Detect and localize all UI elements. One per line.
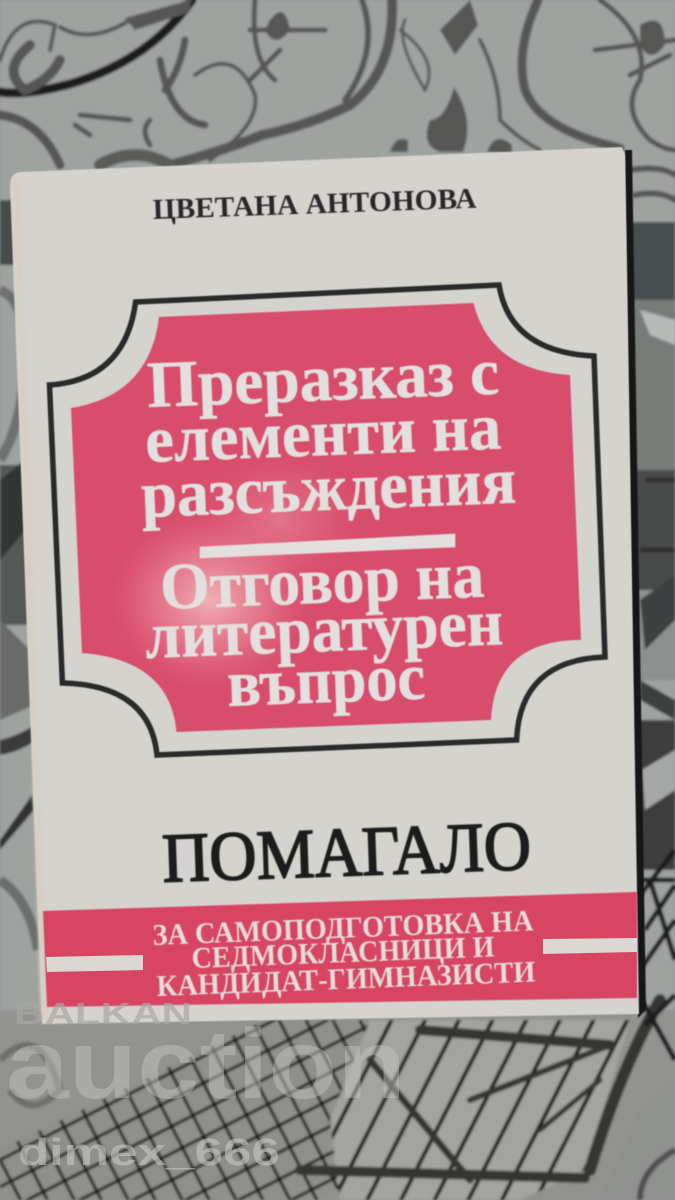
background: right lattice (640, 850, 675, 1060)
watermark: BALKAN: BALKAN (14, 996, 192, 1031)
cover page (10, 147, 639, 1024)
watermark: username: dimex_666 (18, 1132, 280, 1174)
cover aged edge (14, 180, 48, 1020)
band line 2: СЕДМОКЛАСНИЦИ И (191, 930, 495, 975)
pink plaque (71, 303, 581, 732)
author name: ЦВЕТАНА АНТОНОВА (152, 184, 478, 226)
title line 1: Преразказ с (146, 336, 500, 422)
background: lower fabric (0, 1010, 675, 1200)
title line 4: Отговор на (159, 539, 485, 624)
title panel (71, 303, 581, 732)
pink strip (43, 892, 637, 1007)
divider bar (200, 534, 455, 558)
white bar left (46, 955, 143, 972)
ornamental frame (50, 285, 605, 755)
background: dark right patches (630, 222, 675, 870)
background: dark left patches (0, 200, 46, 950)
glare upper (200, 450, 360, 590)
background: bottom right corner (600, 1080, 675, 1200)
heading: ПОМАГАЛО: ПОМАГАЛО (161, 808, 532, 898)
background: damask leaves (125, 0, 665, 155)
title line 5: литературен (144, 586, 504, 673)
background: lattice bands (300, 1000, 660, 1180)
book cover (10, 147, 639, 1024)
title line 3: разсъждения (140, 445, 517, 532)
title line 6: въпрос (226, 640, 426, 721)
white bar right (543, 938, 637, 954)
band line 3: КАНДИДАТ-ГИМНАЗИСТИ (156, 955, 536, 1003)
band text (152, 904, 536, 1003)
background: damask swirls (0, 0, 675, 200)
watermark (6, 996, 406, 1174)
book shadow (625, 150, 646, 1018)
band line 1: ЗА САМОПОДГОТОВКА НА (152, 904, 534, 952)
bottom band (43, 892, 637, 1007)
title line 2: елементи на (144, 390, 502, 477)
background: lattice grid (0, 1020, 450, 1200)
background: lattice stripes (330, 1020, 630, 1200)
watermark: auction: auction (6, 1009, 406, 1119)
photo glare (110, 510, 310, 690)
title text (140, 336, 517, 721)
background: lower left swirls (0, 1045, 60, 1105)
